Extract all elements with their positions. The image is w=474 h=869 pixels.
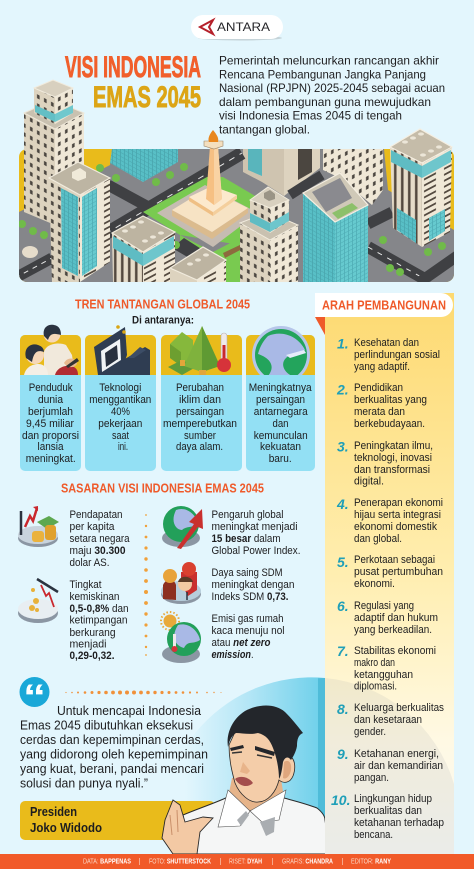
item 10: Lingkungan hidup	[354, 793, 432, 805]
footer credits: DATA: BAPPENAS	[83, 858, 131, 866]
icon: income growth	[18, 506, 59, 547]
footer credits: |	[342, 858, 344, 866]
item 7: 7.	[337, 643, 349, 659]
text: pengaruh global	[212, 509, 300, 557]
card: teknologi: Teknologi	[99, 382, 141, 394]
item 1: perlindungan sosial	[354, 349, 440, 361]
quote text: Emas 2045 dibutuhkan eksekusi	[20, 718, 193, 732]
item 5: Perkotaan sebagai	[354, 554, 435, 566]
item 8	[337, 701, 444, 738]
text: pendapatan per kapita	[70, 509, 130, 569]
card: persaingan antarnegara: kemunculan	[254, 430, 308, 442]
dotted line	[65, 690, 222, 694]
footer credits: |	[138, 858, 140, 866]
card: penduduk dunia: 9,45 miliar	[26, 418, 74, 430]
icon: people	[24, 325, 79, 375]
item 3: digital.	[354, 476, 384, 488]
item 4: ekonomi domestik	[354, 521, 437, 533]
intro text: Nasional (RPJPN) 2025-2045 sebagai acuan	[219, 81, 445, 95]
item 7	[337, 643, 436, 692]
trees	[18, 163, 446, 276]
icon: emissions	[161, 612, 201, 663]
text: pengaruh global: 15 besar dalam	[212, 533, 280, 545]
dotted divider	[144, 514, 148, 656]
item 5: 5.	[337, 554, 349, 570]
card: teknologi: menggantikan	[89, 394, 151, 406]
intro text: Pemerintah meluncurkan rancangan akhir	[219, 54, 439, 68]
item 10	[331, 792, 444, 841]
text: emisi gas rumah kaca: kaca menuju nol	[212, 625, 284, 637]
item 10: bencana.	[354, 829, 393, 841]
footer credits	[0, 854, 474, 869]
building: bottom centre left	[112, 233, 143, 282]
item 7: ketangguhan	[354, 669, 413, 681]
text: tingkat kemiskinan: berkurang	[70, 627, 116, 639]
text: daya saing SDM: Daya saing SDM	[212, 567, 282, 579]
building: centre right tan tower	[240, 223, 270, 282]
quote text: Untuk mencapai Indonesia	[57, 703, 202, 718]
quote text: solusi dan punya nyali.”	[20, 776, 148, 790]
item 9: pangan.	[354, 772, 389, 784]
card: teknologi: ini.	[118, 441, 128, 453]
item 6: adaptif dan hukum	[354, 612, 438, 624]
footer credits: |	[272, 858, 274, 866]
head	[229, 724, 295, 802]
item 1: 1.	[337, 336, 349, 352]
title: EMAS 2045	[93, 81, 201, 114]
quote icon: “	[23, 678, 46, 716]
text: pendapatan per kapita: per kapita	[70, 521, 115, 533]
text: tingkat kemiskinan: kemiskinan	[70, 591, 120, 603]
item 7: Stabilitas ekonomi	[354, 645, 436, 657]
text: tingkat kemiskinan: 0,5-0,8% dan	[70, 603, 128, 615]
intro text	[219, 54, 445, 136]
intro text: Rencana Pembangunan Jangka Panjang	[219, 68, 426, 82]
card: perubahan iklim: daya alam.	[176, 441, 223, 453]
shaded arc over panel	[325, 678, 454, 854]
card: perubahan iklim: persaingan	[176, 406, 224, 418]
item 9: air dan kemandirian	[354, 760, 443, 772]
item 5: ekonomi.	[354, 578, 395, 590]
neck	[230, 778, 283, 810]
text: pengaruh global: Global Power Index.	[212, 545, 300, 557]
item 3: 3.	[337, 438, 349, 454]
footer credits: FOTO: SHUTTERSTOCK	[149, 858, 211, 866]
heading: tren tantangan: TREN TANTANGAN GLOBAL 2045	[75, 296, 250, 312]
item 1	[337, 336, 440, 373]
item 7: makro dan	[354, 657, 395, 669]
card: perubahan iklim: Perubahan	[176, 382, 224, 394]
item 6: 6.	[337, 598, 349, 614]
quote text: yang kuat, berani, pandai mencari	[20, 761, 204, 776]
text: emisi gas rumah kaca: Emisi gas rumah	[212, 613, 284, 625]
quote icon	[20, 677, 50, 716]
text: tingkat kemiskinan: menjadi	[70, 638, 106, 650]
quote text: cerdas dan kepemimpinan cerdas,	[20, 732, 204, 747]
logo: ANTARA: ANTARA	[217, 20, 270, 34]
quote text: yang didorong oleh kepemimpinan	[20, 746, 208, 762]
item 5: pusat pertumbuhan	[354, 566, 443, 578]
item 10: 10.	[331, 792, 350, 808]
name box: Presiden	[30, 805, 77, 819]
item 1: yang adaptif.	[354, 361, 410, 373]
item 8: gender.	[354, 726, 386, 738]
item 2: berkebudayaan.	[354, 418, 425, 430]
intro text: visi Indonesia Emas 2045 di tengah	[219, 108, 402, 122]
quote text	[20, 703, 208, 790]
text: pengaruh global: Pengaruh global	[212, 509, 284, 521]
footer credits: |	[220, 858, 222, 866]
card: teknologi: 40%	[111, 406, 130, 418]
ribbon heading	[315, 293, 453, 335]
icon: trees and thermometer	[168, 326, 231, 376]
hand	[162, 800, 213, 854]
city illustration with Monas monument	[15, 80, 460, 282]
card: persaingan antarnegara	[246, 326, 315, 471]
item 9: Ketahanan energi,	[354, 748, 439, 760]
card: penduduk dunia	[20, 325, 81, 471]
building: bottom centre	[170, 268, 197, 282]
panel: arah pembangunan	[315, 293, 454, 854]
eyebrows, eyes, nose, mouth	[230, 745, 275, 756]
heading: tren tantangan	[75, 296, 250, 326]
item 8: 8.	[337, 701, 349, 717]
title: VISI INDONESIA	[65, 51, 201, 84]
plaza	[143, 177, 262, 245]
name box	[20, 801, 215, 840]
card: persaingan antarnegara: persaingan	[256, 394, 305, 406]
card: teknologi: pekerjaan	[98, 418, 142, 430]
item 3: dan transformasi	[354, 464, 430, 476]
card: penduduk dunia: dan proporsi	[22, 430, 79, 442]
item 10: berkualitas dan	[354, 805, 422, 817]
text: daya saing SDM	[212, 567, 294, 603]
building: glass tower with solar roof	[303, 193, 335, 282]
intro text: dalam pembangunan guna mewujudkan	[219, 95, 431, 109]
item 2	[336, 382, 427, 430]
footer credits: RISET: DYAH	[229, 858, 262, 866]
roads	[95, 153, 242, 240]
name box: Joko Widodo	[30, 821, 102, 835]
text: daya saing SDM: meningkat dengan	[212, 579, 294, 591]
item 4: 4.	[336, 496, 349, 512]
text: emisi gas rumah kaca: atau net zero	[212, 637, 271, 649]
item 7: diplomasi.	[354, 680, 397, 692]
card: perubahan iklim	[161, 326, 242, 471]
item 6: Regulasi yang	[354, 600, 414, 612]
card: persaingan antarnegara: Meningkatnya	[249, 382, 312, 394]
footer credits: EDITOR: RANY	[351, 858, 391, 866]
item 4: dan global.	[354, 533, 402, 545]
card: teknologi: saat	[112, 430, 130, 442]
text: daya saing SDM: Indeks SDM 0,73.	[212, 591, 288, 603]
card: persaingan antarnegara: dan	[272, 418, 288, 430]
item 4	[336, 496, 443, 545]
card: persaingan antarnegara: baru.	[269, 453, 292, 465]
item 6: yang berkeadilan.	[354, 624, 432, 636]
card: perubahan iklim: sumber	[184, 430, 216, 442]
logo: ANTARA	[191, 15, 283, 40]
item 2: merata dan	[354, 406, 405, 418]
item 4: Penerapan ekonomi	[354, 497, 443, 509]
icon: globe	[252, 326, 310, 375]
intro text: tantangan global.	[219, 122, 310, 136]
item 2: berkualitas yang	[354, 394, 427, 406]
item 5	[337, 554, 443, 590]
monument: Monas	[204, 130, 223, 205]
icon: computer chips	[94, 325, 150, 375]
footer credits: GRAFIS: CHANDRA	[282, 858, 333, 866]
building: left tower	[24, 113, 55, 225]
text: tingkat kemiskinan: ketimpangan	[70, 614, 128, 626]
portrait: President Joko Widodo	[162, 706, 330, 854]
card: penduduk dunia: meningkat.	[26, 453, 76, 465]
text: pendapatan per kapita: maju 30.300	[70, 545, 126, 557]
item 9: 9.	[337, 746, 349, 762]
ribbon heading: ARAH PEMBANGUNAN	[322, 298, 446, 312]
text: pendapatan per kapita: setara negara	[70, 533, 130, 545]
card: penduduk dunia: lansia	[38, 441, 64, 453]
item 3	[337, 438, 433, 488]
item 10: ketahanan terhadap	[354, 817, 444, 829]
item 2: Pendidikan	[354, 382, 403, 394]
text: emisi gas rumah kaca	[212, 613, 284, 661]
heading: sasaran: SASARAN VISI INDONESIA EMAS 2045	[61, 480, 264, 496]
subheading: Di antaranya:	[132, 314, 194, 326]
icon: global influence	[162, 506, 203, 549]
text: pendapatan per kapita: Pendapatan	[70, 509, 122, 521]
blue arc behind portrait	[162, 677, 325, 854]
card: penduduk dunia: dunia	[38, 394, 64, 406]
text: pendapatan per kapita: dolar AS.	[70, 557, 110, 569]
card: persaingan antarnegara: kekuatan	[260, 441, 301, 453]
text: tingkat kemiskinan	[70, 579, 128, 662]
item 2: 2.	[336, 382, 349, 398]
text: pengaruh global: meningkat menjadi	[212, 521, 298, 533]
text: tingkat kemiskinan: Tingkat	[70, 579, 102, 591]
card: penduduk dunia: Penduduk	[29, 382, 73, 394]
hair	[228, 706, 303, 779]
card: perubahan iklim: memperebutkan	[163, 418, 237, 430]
card: perubahan iklim: iklim dan	[179, 394, 221, 406]
text: tingkat kemiskinan: 0,29-0,32.	[70, 650, 114, 662]
icon: poverty decline	[18, 579, 58, 623]
item 3: Peningkatan ilmu,	[354, 440, 433, 452]
card: penduduk dunia: berjumlah	[28, 406, 73, 418]
item 3: teknologi, inovasi	[354, 452, 432, 464]
building: front left glass tower	[49, 178, 80, 282]
text: emisi gas rumah kaca: emission.	[212, 649, 254, 661]
shirt	[183, 797, 330, 854]
card: persaingan antarnegara: antarnegara	[254, 406, 308, 418]
item 8: dan kesetaraan	[354, 714, 422, 726]
item 8: Keluarga berkualitas	[354, 702, 444, 714]
building: right tower	[390, 147, 422, 247]
icon: workers	[161, 562, 201, 604]
item 6	[337, 598, 438, 636]
ground	[19, 149, 454, 282]
item 9	[337, 746, 443, 784]
title	[65, 51, 201, 114]
item 1: Kesehatan dan	[354, 337, 419, 349]
card: teknologi	[85, 325, 156, 471]
item 4: hijau serta integrasi	[354, 509, 441, 521]
